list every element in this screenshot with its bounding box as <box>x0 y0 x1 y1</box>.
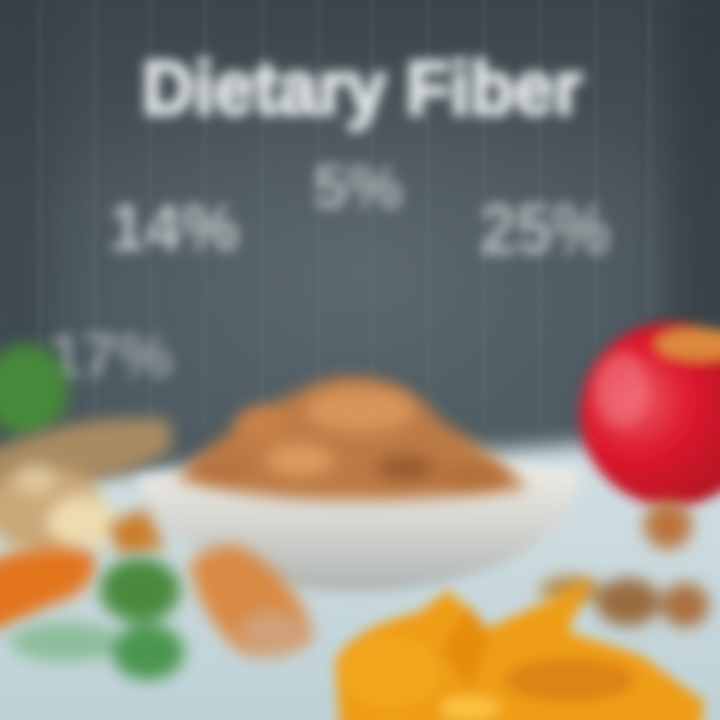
orange mango strips <box>335 578 705 720</box>
nuts, right <box>540 501 709 627</box>
ginger pieces, left <box>0 418 172 552</box>
apple <box>580 322 720 506</box>
flake highlights <box>195 388 504 485</box>
table surface <box>0 430 720 720</box>
dried fruit piece <box>190 545 312 656</box>
percentage labels <box>48 153 610 391</box>
title: Dietary Fiber <box>142 46 582 131</box>
label: 17%: 17% <box>48 322 172 391</box>
green leaf, left <box>0 344 68 436</box>
label: 5%: 5% <box>313 153 403 222</box>
green herb leaves <box>10 558 184 680</box>
bowl of fiber flakes <box>175 377 528 500</box>
label: 14%: 14% <box>109 190 239 264</box>
label: 25%: 25% <box>480 190 610 270</box>
orange carrot slices, left <box>0 508 165 635</box>
bowl <box>135 459 580 592</box>
